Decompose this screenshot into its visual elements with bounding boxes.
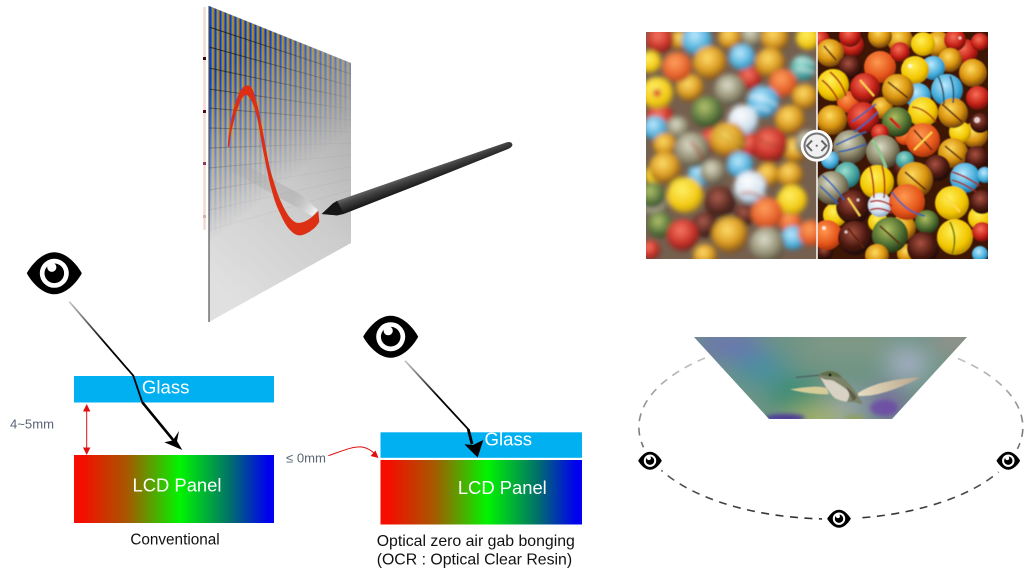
red stroke drawn by pen [228,85,319,235]
dashed viewing orbit [639,358,1023,519]
heading: glass layer [74,376,274,402]
stylus pen [319,137,515,221]
LCD panel layer [380,460,582,524]
gap label: ≤ 0mm [286,450,326,466]
foreground flowers [765,400,898,422]
panel: optical bonding display stack [286,316,582,568]
heading: glass layer: Glass [142,376,189,398]
air gap label: 4~5mm [10,416,54,432]
panel: conventional display stack [10,252,274,549]
panel: pen display with subpixel grid [203,0,515,325]
icon: left viewer eye [635,446,665,476]
glass layer: Glass [485,428,532,450]
icon: viewer eye [27,252,82,294]
pen reflection on panel [222,152,318,216]
panel: image sharpness comparison of marbles [646,32,988,259]
blurred marbles (left half) [646,32,816,259]
panel left edge and contact strip [208,6,210,322]
LCD panel layer: LCD Panel [133,475,221,496]
icon: right viewer eye [993,446,1023,476]
comparison slider handle [801,32,833,259]
panel: wide viewing angle diagram [635,330,1023,536]
glass layer [380,428,582,458]
icon: viewer eye [363,316,418,358]
LCD panel surface [209,6,351,322]
caption: optical bonding: Optical zero air gab bonging [377,533,575,550]
arrow: light path through glass [69,302,182,450]
caption: optical bonding: (OCR : Optical Clear Resin) [377,551,572,568]
arrow: red air gap dimension [83,404,90,455]
hummingbird [790,371,920,404]
LCD panel layer [74,455,274,523]
subpixel grid fading out [210,6,351,236]
sharp marbles (right half) [818,32,988,259]
LCD panel layer: LCD Panel [458,477,547,498]
caption: conventional: Conventional [130,532,220,548]
arrow: red pointer to bond line [328,447,378,458]
caption: optical bonding [377,533,575,568]
arrow: light path through bonded glass [405,361,483,458]
icon: bottom viewer eye [822,502,856,536]
hummingbird photo screen [694,337,967,419]
